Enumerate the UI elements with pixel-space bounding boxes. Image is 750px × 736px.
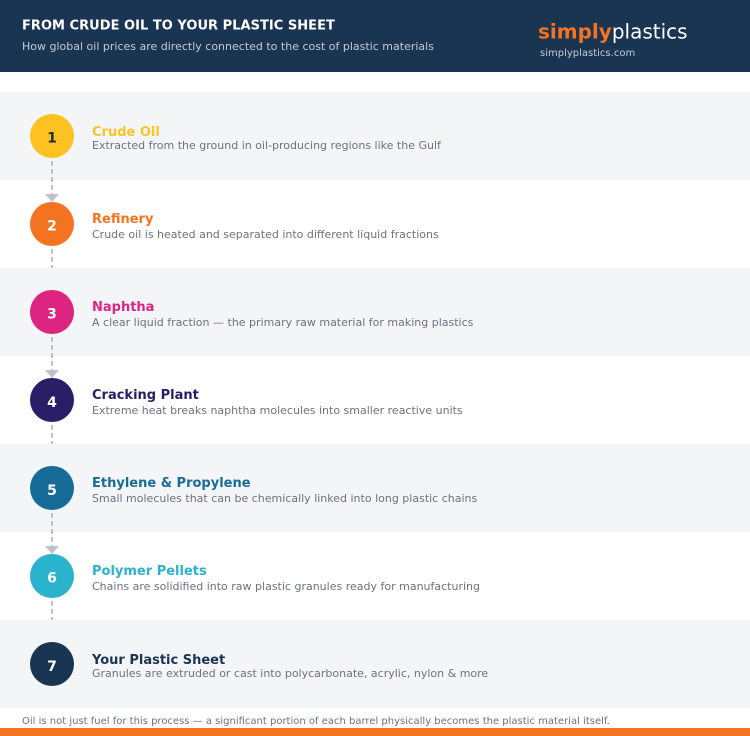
step 3: naphtha: 3 — [47, 306, 57, 322]
header banner — [0, 0, 750, 72]
logo: simplyplastics — [538, 20, 688, 44]
step 7: your plastic sheet — [30, 642, 488, 686]
step 3: naphtha: A clear liquid fraction — the primary raw material for making plastics — [92, 316, 474, 329]
step 2: refinery: Refinery — [92, 212, 154, 227]
step 5: ethylene and propylene: Small molecules that can be chemically linked into long plastic chains — [92, 492, 478, 505]
step 2: refinery: Crude oil is heated and separated into different liquid fractions — [92, 228, 439, 241]
step 6: polymer pellets: 6 — [47, 570, 57, 586]
step 1: crude oil: Crude Oil — [92, 125, 160, 140]
title: FROM CRUDE OIL TO YOUR PLASTIC SHEET — [22, 18, 335, 34]
step 1: crude oil — [30, 114, 442, 158]
step 7: your plastic sheet: Granules are extruded or cast into polycarbonate, acrylic, nylon & more — [92, 667, 488, 680]
website: simplyplastics.com — [540, 48, 635, 59]
step 7: your plastic sheet: Your Plastic Sheet — [91, 653, 225, 668]
step 1: crude oil: 1 — [47, 130, 57, 146]
step 4: cracking plant — [30, 378, 463, 422]
step 4: cracking plant: Cracking Plant — [92, 388, 199, 403]
step 6: polymer pellets — [30, 554, 480, 598]
step 4: cracking plant: Extreme heat breaks naphtha molecules into smaller reactive units — [92, 404, 463, 417]
step 7: your plastic sheet: 7 — [47, 659, 57, 675]
step 3: naphtha: Naphtha — [92, 300, 154, 315]
arrowheads — [45, 194, 59, 554]
connectors — [51, 161, 53, 620]
step 5: ethylene and propylene — [30, 466, 478, 510]
step 3: naphtha — [30, 290, 474, 334]
step 6: polymer pellets: Polymer Pellets — [92, 564, 207, 579]
step 4: cracking plant: 4 — [47, 395, 57, 411]
step 2: refinery: 2 — [47, 218, 57, 234]
step 1: crude oil: Extracted from the ground in oil-producing regions like the Gulf — [92, 139, 442, 152]
step 2: refinery — [30, 202, 439, 246]
subtitle: How global oil prices are directly connected to the cost of plastic materials — [22, 40, 434, 53]
step 6: polymer pellets: Chains are solidified into raw plastic granules ready for manufacturing — [92, 580, 480, 593]
step 5: ethylene and propylene: 5 — [47, 483, 57, 499]
footer note: Oil is not just fuel for this process — a significant portion of each barrel physically becomes the plastic material itself. — [22, 716, 610, 727]
step 5: ethylene and propylene: Ethylene & Propylene — [92, 476, 251, 491]
footer bar — [0, 728, 750, 736]
